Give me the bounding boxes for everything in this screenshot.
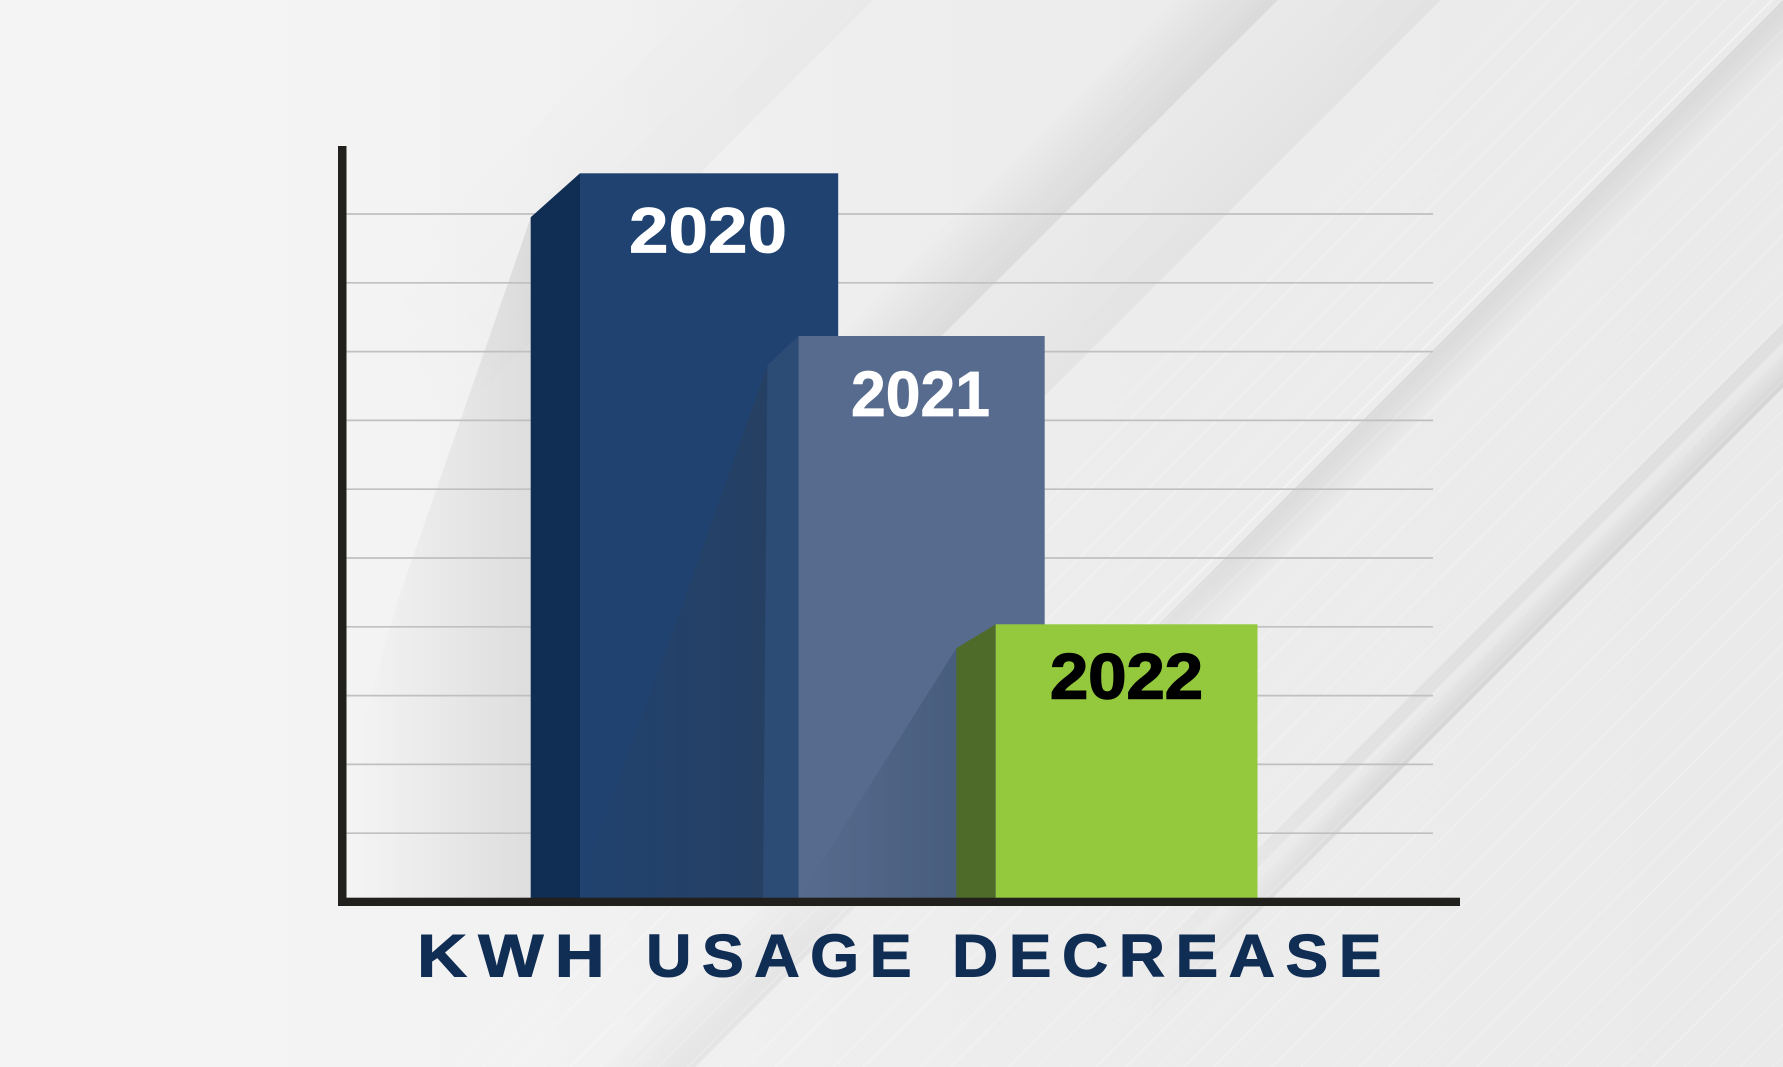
title: KWH USAGE DECREASE: USAGE bbox=[646, 922, 922, 990]
background: diagonal light-grey bands bbox=[642, 0, 1783, 1067]
shadow of the 2022 bar on the 2021 bar bbox=[799, 648, 956, 898]
shadow cast by the 2020 bar bbox=[347, 217, 531, 898]
bar: 2020 bbox=[531, 173, 838, 898]
bar: 2022 bbox=[956, 624, 1258, 898]
shadow of the 2021 bar on the 2020 bar bbox=[580, 365, 768, 898]
label: 2021: 2021 bbox=[851, 358, 990, 430]
label: 2020: 2020 bbox=[629, 195, 787, 267]
chart axes bbox=[338, 146, 1460, 906]
chart grid lines bbox=[346, 214, 1433, 833]
bar: 2021 bbox=[763, 336, 1045, 898]
title: KWH USAGE DECREASE: DECREASE bbox=[952, 922, 1392, 990]
title: KWH USAGE DECREASE bbox=[417, 922, 1392, 990]
label: 2022: 2022 bbox=[1050, 640, 1203, 712]
title: KWH USAGE DECREASE: KWH bbox=[417, 922, 616, 990]
